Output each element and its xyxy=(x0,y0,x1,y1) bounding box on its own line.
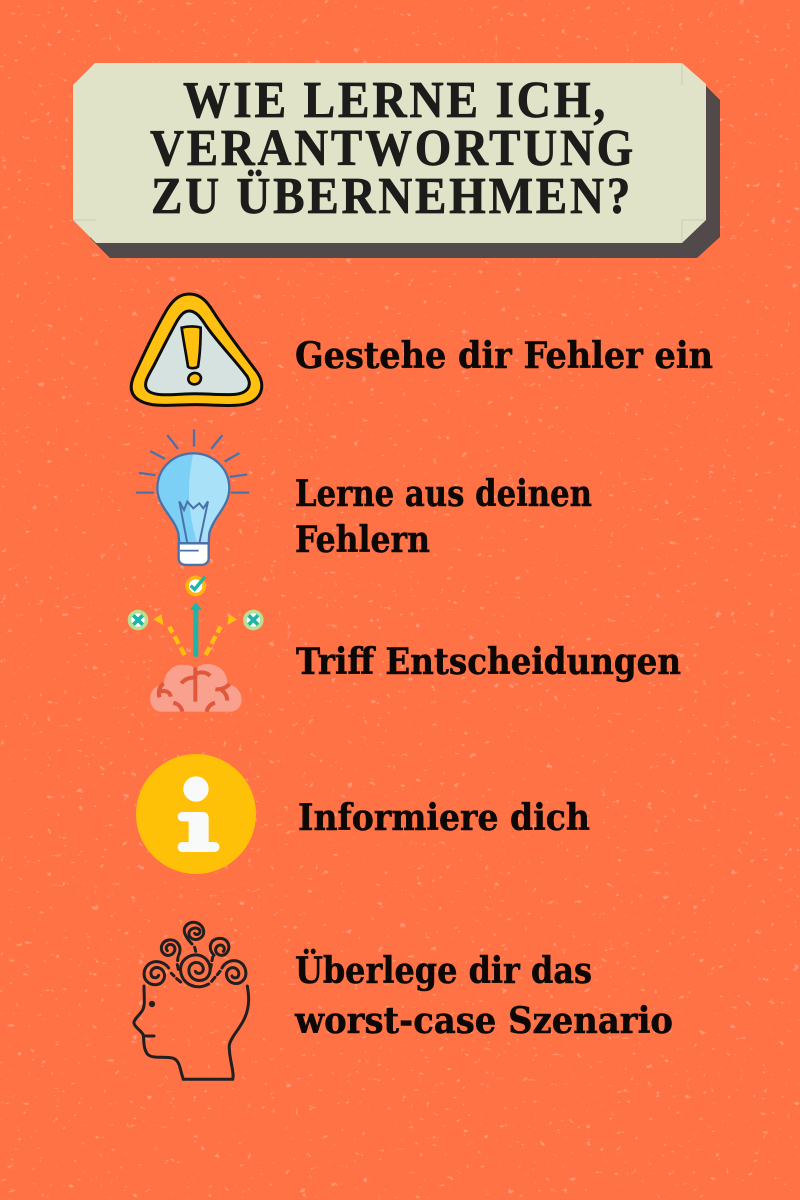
cross badge left xyxy=(128,610,148,630)
title text: ZU ÜBERNEHMEN? xyxy=(151,168,633,225)
icon: light bulb xyxy=(137,431,248,565)
icon: info circle xyxy=(136,754,256,874)
text: step 2: Fehlern xyxy=(295,519,430,561)
text: step 2 xyxy=(295,473,592,561)
text: step 2: Lerne aus deinen xyxy=(295,473,592,515)
text: step 5 xyxy=(294,949,673,1042)
dashed arrows xyxy=(169,627,185,655)
title text: VERANTWORTUNG xyxy=(150,120,636,177)
brain xyxy=(150,664,242,712)
cross badge right xyxy=(243,610,264,630)
title text xyxy=(150,72,636,225)
text: step 5: Überlege dir das xyxy=(295,949,592,992)
title banner xyxy=(73,63,720,258)
title text: WIE LERNE ICH, xyxy=(183,72,608,129)
check badge xyxy=(185,576,206,596)
icon: decision brain xyxy=(128,576,264,712)
icon: head with spirals xyxy=(134,922,249,1079)
banner card xyxy=(73,63,706,243)
text: step 3: Triff Entscheidungen xyxy=(296,641,681,683)
text: step 1: Gestehe dir Fehler ein xyxy=(295,335,713,377)
text: step 4: Informiere dich xyxy=(298,797,590,839)
banner shadow xyxy=(90,85,720,258)
icon: warning sign xyxy=(131,294,262,406)
text: step 5: worst-case Szenario xyxy=(294,1000,673,1042)
teal arrow xyxy=(193,609,198,657)
